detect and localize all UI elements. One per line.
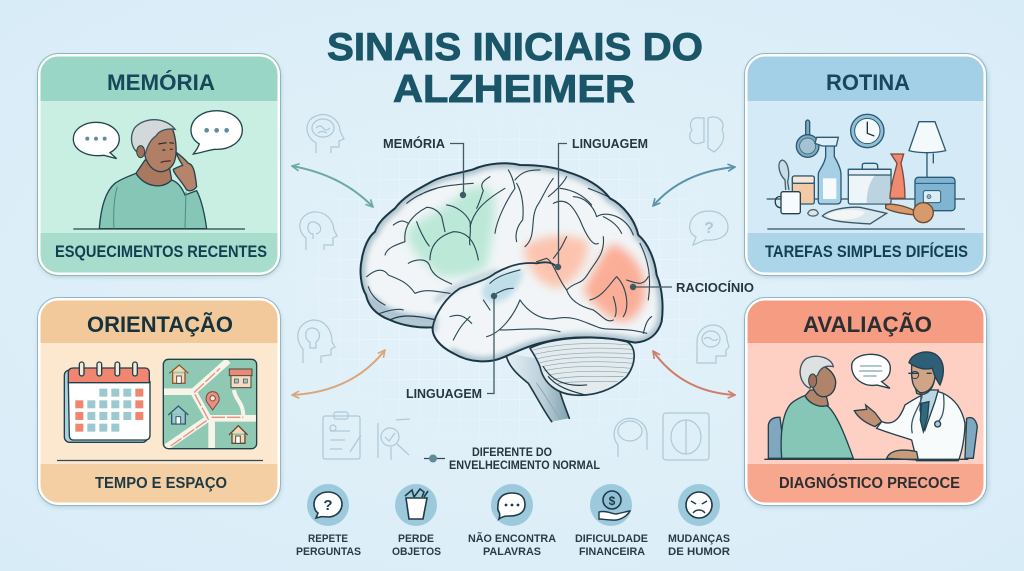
panel: memória — [38, 54, 281, 277]
caption: tempo e espaço: TEMPO E ESPAÇO — [95, 475, 227, 492]
icon: question bubble: ? — [323, 497, 333, 514]
cerebrum — [361, 163, 663, 361]
faint question mark: ? — [704, 220, 714, 237]
heading: avaliação: AVALIAÇÃO — [803, 312, 932, 337]
label: raciocínio leader line: RACIOCÍNIO — [676, 280, 754, 295]
sign: dificuldade financeira: DIFICULDADE — [575, 533, 648, 545]
panel: orientação — [38, 298, 281, 507]
arrow: orientação to brain — [292, 350, 385, 395]
icon: sad face — [678, 484, 720, 526]
sign: dificuldade financeira: FINANCEIRA — [579, 546, 645, 558]
caption: tarefas simples difíceis: TAREFAS SIMPLES DIFÍCEIS — [765, 242, 968, 261]
icon: speech bubble — [491, 484, 533, 526]
sign: dificuldade financeira — [575, 484, 648, 558]
sign: não encontra palavras: NÃO ENCONTRA — [468, 532, 556, 545]
sign: mudanças de humor: DE HUMOR — [668, 546, 730, 558]
sign: não encontra palavras — [468, 484, 556, 558]
label: linguagem bottom leader line: LINGUAGEM — [406, 387, 482, 401]
label: raciocínio leader line — [630, 280, 754, 295]
faint icons around brain — [298, 115, 729, 460]
sign: repete perguntas: PERGUNTAS — [296, 546, 361, 558]
illustration: calendar — [64, 362, 150, 442]
caption: diagnóstico precoce: DIAGNÓSTICO PRECOCE — [779, 474, 960, 492]
label: linguagem top leader line: LINGUAGEM — [572, 137, 648, 151]
sign: mudanças de humor: MUDANÇAS — [668, 533, 730, 545]
panel: rotina — [744, 54, 988, 277]
callout: diferente do envelhecimento normal: DIFERENTE DO — [472, 447, 552, 459]
label: memória leader line: MEMÓRIA — [383, 136, 445, 151]
title: ALZHEIMER — [393, 68, 635, 111]
arrow: avaliação to brain — [653, 351, 735, 395]
caption: esquecimentos recentes: ESQUECIMENTOS RECENTES — [55, 243, 267, 261]
heading: rotina: ROTINA — [826, 70, 910, 95]
sign: perde objetos: OBJETOS — [392, 546, 441, 558]
arrow: memória to brain — [292, 166, 373, 207]
panel: avaliação — [744, 298, 988, 507]
sign: perde objetos — [392, 484, 441, 558]
illustration: man thinking with speech bubbles — [73, 111, 245, 229]
illustration: map with route — [163, 359, 257, 449]
sign: repete perguntas — [296, 484, 361, 558]
callout: diferente do envelhecimento normal — [424, 447, 600, 472]
sign: não encontra palavras: PALAVRAS — [483, 546, 541, 558]
brain outline — [361, 163, 663, 361]
heading: memória: MEMÓRIA — [107, 70, 215, 95]
arrow: rotina to brain — [653, 167, 735, 206]
icon: hand holding coin: $ — [609, 494, 616, 508]
sulci lines — [367, 170, 652, 340]
heading: orientação: ORIENTAÇÃO — [87, 312, 233, 337]
brain illustration — [361, 163, 663, 422]
label: linguagem bottom leader line — [406, 293, 497, 401]
brain stem — [507, 353, 569, 422]
sign: mudanças de humor — [668, 484, 730, 558]
callout: diferente do envelhecimento normal: ENVELHECIMENTO NORMAL — [449, 460, 600, 472]
title: SINAIS INICIAIS DO — [327, 26, 703, 69]
label: linguagem top leader line — [555, 137, 648, 270]
label: memória leader line — [383, 136, 466, 198]
title — [327, 26, 703, 111]
illustration: patient and doctor — [764, 352, 977, 461]
sign: repete perguntas: REPETE — [308, 533, 348, 545]
icon: waste bin with items — [395, 484, 437, 526]
illustration: household objects — [767, 114, 965, 229]
cerebellum — [530, 338, 634, 395]
sign: perde objetos: PERDE — [398, 533, 434, 545]
